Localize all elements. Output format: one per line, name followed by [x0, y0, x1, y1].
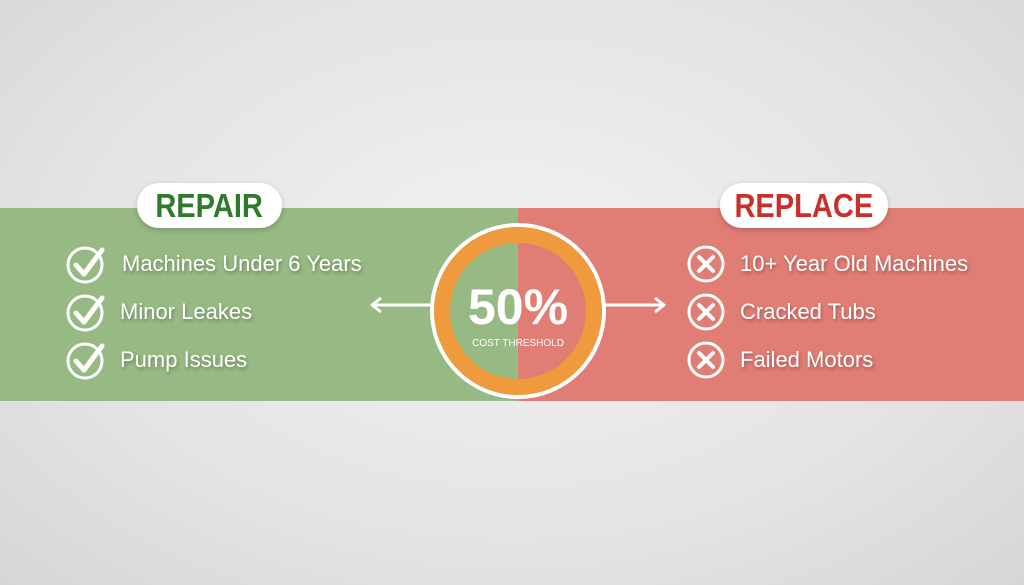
panel: replace band — [518, 208, 1024, 401]
text: label: COST THRESHOLD — [472, 338, 564, 349]
icon: x — [688, 294, 724, 330]
heading: replace: REPLACE — [735, 187, 873, 224]
icon: check — [66, 294, 104, 332]
text: item 1: 10+ Year Old Machines — [740, 251, 968, 276]
text: item 3: Pump Issues — [120, 347, 247, 372]
list: repair items — [66, 246, 363, 380]
icon: x — [688, 342, 724, 378]
text: item 1: Machines Under 6 Years — [122, 251, 362, 276]
heading: replace — [720, 183, 888, 228]
chart: threshold circle — [430, 223, 606, 399]
text: item 2: Minor Leakes — [120, 299, 252, 324]
text: percentage: 50% — [468, 279, 568, 335]
arrow: right — [606, 297, 666, 313]
icon: check — [66, 342, 104, 380]
arrow: left — [370, 297, 430, 313]
text: item 2: Cracked Tubs — [740, 299, 876, 324]
icon: x — [688, 246, 724, 282]
icon: check — [66, 246, 104, 284]
panel: repair band — [0, 208, 518, 401]
heading: repair: REPAIR — [156, 187, 263, 224]
heading: repair — [137, 183, 282, 228]
list: replace items — [688, 246, 970, 378]
text: item 3: Failed Motors — [740, 347, 873, 372]
